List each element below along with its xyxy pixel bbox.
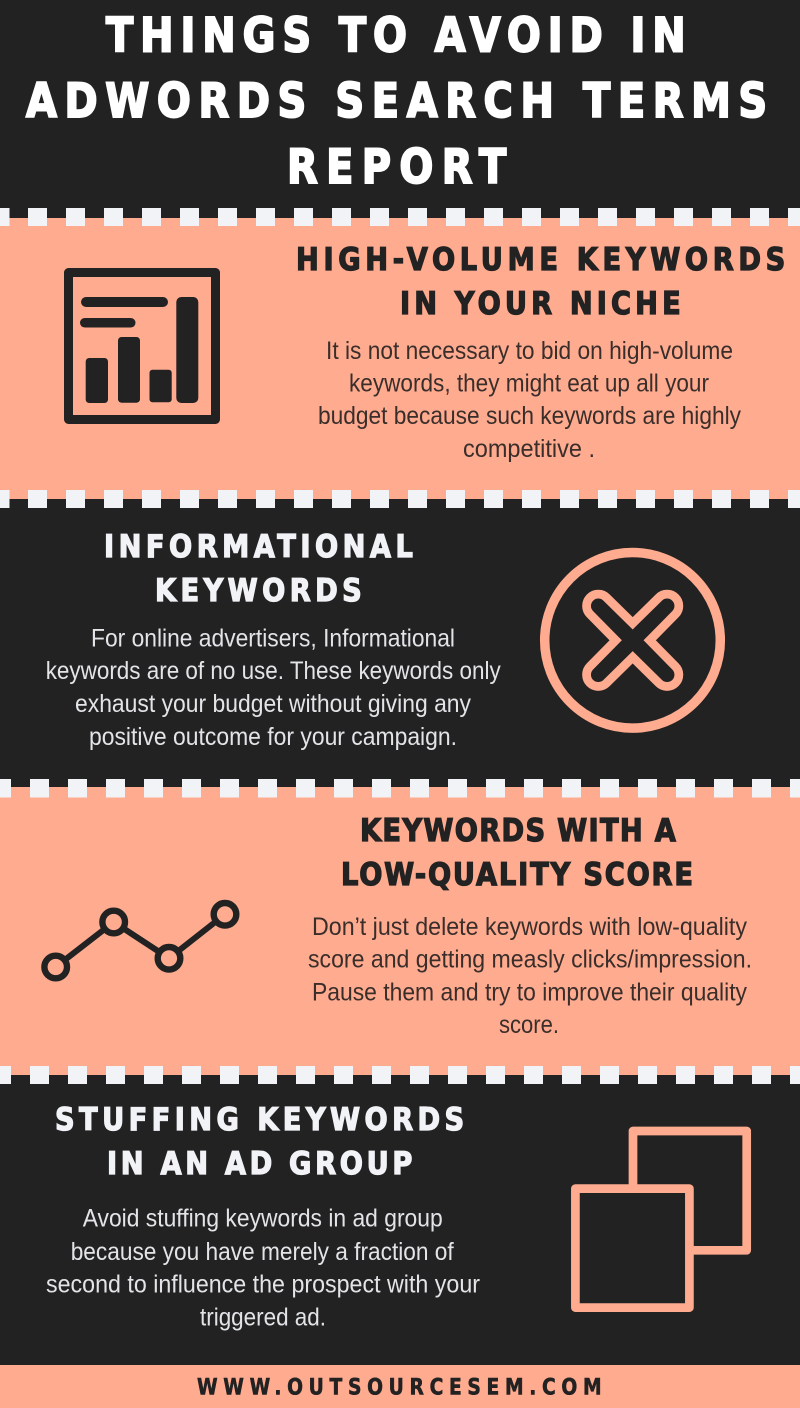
text block: stuffing keywords: second to influence the prospect with your — [46, 1271, 480, 1299]
strip: dashed divider 3 — [0, 779, 800, 798]
heading: low-quality score: LOW-QUALITY SCORE — [341, 857, 693, 893]
text block: low-quality score — [308, 913, 752, 1039]
text block: informational keywords: positive outcome for your campaign. — [89, 723, 457, 751]
panel: high-volume keywords — [0, 218, 800, 499]
text block: informational keywords: For online advertisers, Informational — [91, 625, 455, 653]
icon: overlapping squares — [575, 1131, 747, 1308]
strip: dashed divider 2 — [0, 490, 800, 508]
title: REPORT — [287, 141, 507, 195]
text block: high-volume keywords: budget because such keywords are highly — [318, 402, 741, 430]
title: THINGS TO AVOID IN — [106, 9, 686, 63]
heading: informational keywords: KEYWORDS — [155, 573, 362, 609]
heading: high-volume keywords — [296, 242, 785, 322]
heading: high-volume keywords: HIGH-VOLUME KEYWORDS — [296, 242, 785, 278]
footer url: WWW.OUTSOURCESEM.COM — [197, 1374, 602, 1400]
text block: stuffing keywords — [46, 1205, 480, 1332]
heading: low-quality score: KEYWORDS WITH A — [360, 813, 676, 849]
text block: informational keywords — [46, 625, 501, 751]
heading: stuffing keywords — [55, 1102, 464, 1182]
title: ADWORDS SEARCH TERMS — [26, 75, 767, 129]
strip: dashed divider 4 — [0, 1066, 800, 1084]
title — [26, 9, 767, 195]
heading: high-volume keywords: IN YOUR NICHE — [400, 286, 681, 322]
text block: low-quality score: Pause them and try to improve their quality — [312, 979, 747, 1007]
text block: stuffing keywords: because you have merely a fraction of — [71, 1238, 454, 1266]
panel: footer — [0, 1365, 800, 1408]
text block: high-volume keywords: competitive . — [463, 435, 595, 463]
heading: stuffing keywords: STUFFING KEYWORDS — [55, 1102, 464, 1138]
icon: x in circle — [545, 552, 720, 728]
heading: informational keywords: INFORMATIONAL — [104, 529, 413, 565]
text block: stuffing keywords: Avoid stuffing keywords in ad group — [83, 1205, 443, 1233]
text block: informational keywords: keywords are of no use. These keywords only — [46, 657, 501, 685]
strip: dashed divider 1 — [0, 208, 800, 226]
text block: informational keywords: exhaust your budget without giving any — [75, 690, 471, 718]
icon: line graph — [44, 903, 236, 978]
text block: high-volume keywords: keywords, they might eat up all your — [349, 370, 709, 398]
text block: high-volume keywords: It is not necessary to bid on high-volume — [326, 337, 733, 365]
heading: informational keywords — [104, 529, 413, 609]
panel: informational keywords — [0, 499, 800, 787]
text block: high-volume keywords — [318, 337, 741, 463]
heading: stuffing keywords: IN AN AD GROUP — [107, 1146, 412, 1182]
text block: stuffing keywords: triggered ad. — [200, 1304, 326, 1332]
icon: bar chart report — [68, 272, 216, 420]
panel: stuffing keywords — [0, 1075, 800, 1365]
panel: title header — [0, 0, 800, 218]
text block: low-quality score: score and getting measly clicks/impression. — [308, 946, 752, 974]
heading: low-quality score — [341, 813, 693, 893]
text block: low-quality score: Don’t just delete keywords with low-quality — [312, 913, 747, 941]
panel: low-quality score — [0, 787, 800, 1075]
text block: low-quality score: score. — [499, 1011, 559, 1039]
